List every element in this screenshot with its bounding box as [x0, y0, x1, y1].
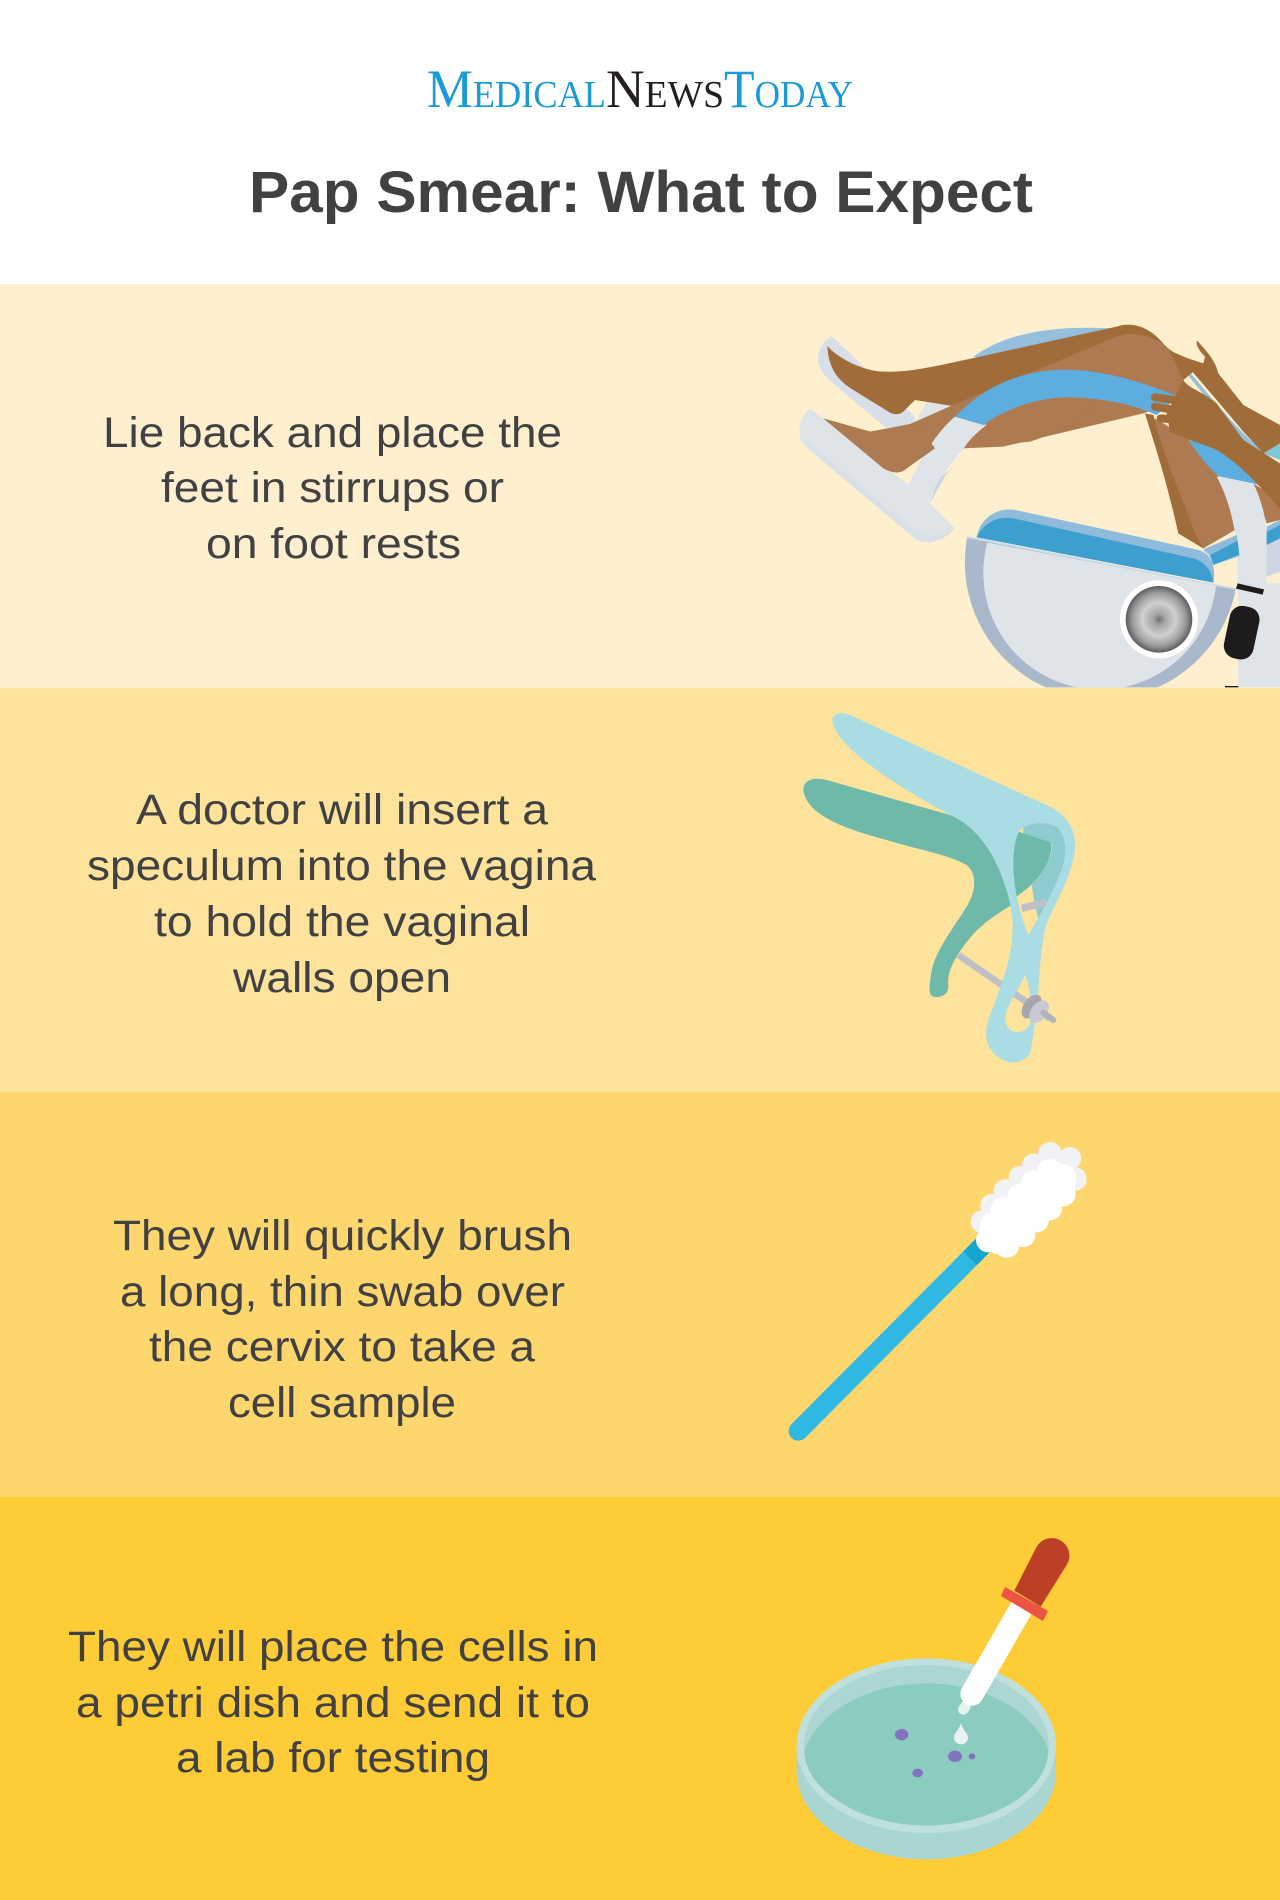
panel: step 2 speculum: [0, 688, 1280, 1092]
title: Pap Smear: What to Expect: [249, 160, 1033, 225]
step 3 text: the cervix to take a: [149, 1323, 535, 1371]
drop: [954, 1723, 968, 1744]
logo: Medical News Today: NEWS: [606, 59, 724, 119]
logo: Medical News Today: MEDICAL: [427, 59, 606, 119]
step 2 text: [87, 786, 596, 1002]
step 2 text: to hold the vaginal: [154, 898, 530, 946]
illustration: patient on exam table: [799, 325, 1280, 699]
step 3 text: They will quickly brush: [113, 1212, 572, 1260]
illustration: petri dish and dropper: [797, 1538, 1069, 1859]
step 2 text: speculum into the vagina: [87, 842, 596, 890]
illustration: cotton swab: [798, 1142, 1087, 1431]
step 1 text: [103, 409, 562, 568]
step 3 text: cell sample: [228, 1379, 456, 1427]
cells: [895, 1729, 975, 1777]
step 4 text: They will place the cells in: [68, 1623, 598, 1671]
logo: Medical News Today: TODAY: [724, 59, 853, 119]
step 2 text: A doctor will insert a: [136, 786, 548, 834]
step 4 text: a lab for testing: [176, 1734, 490, 1782]
dropper: [963, 1538, 1069, 1709]
step 1 text: feet in stirrups or: [161, 464, 504, 512]
wheel: [1120, 580, 1198, 658]
logo: Medical News Today: [427, 59, 853, 119]
panel: step 3 swab: [0, 1092, 1280, 1497]
step 3 text: [113, 1212, 572, 1427]
step 3 text: a long, thin swab over: [120, 1268, 565, 1316]
step 4 text: a petri dish and send it to: [76, 1679, 590, 1727]
illustration: speculum: [803, 713, 1075, 1062]
step 4 text: [68, 1623, 598, 1782]
step 1 text: on foot rests: [206, 520, 461, 568]
screw knob: [1017, 991, 1053, 1027]
step 1 text: Lie back and place the: [103, 409, 562, 457]
panel: step 1 lie back: [0, 284, 1280, 699]
step 2 text: walls open: [232, 954, 451, 1002]
panel: step 4 petri dish: [0, 1497, 1280, 1900]
